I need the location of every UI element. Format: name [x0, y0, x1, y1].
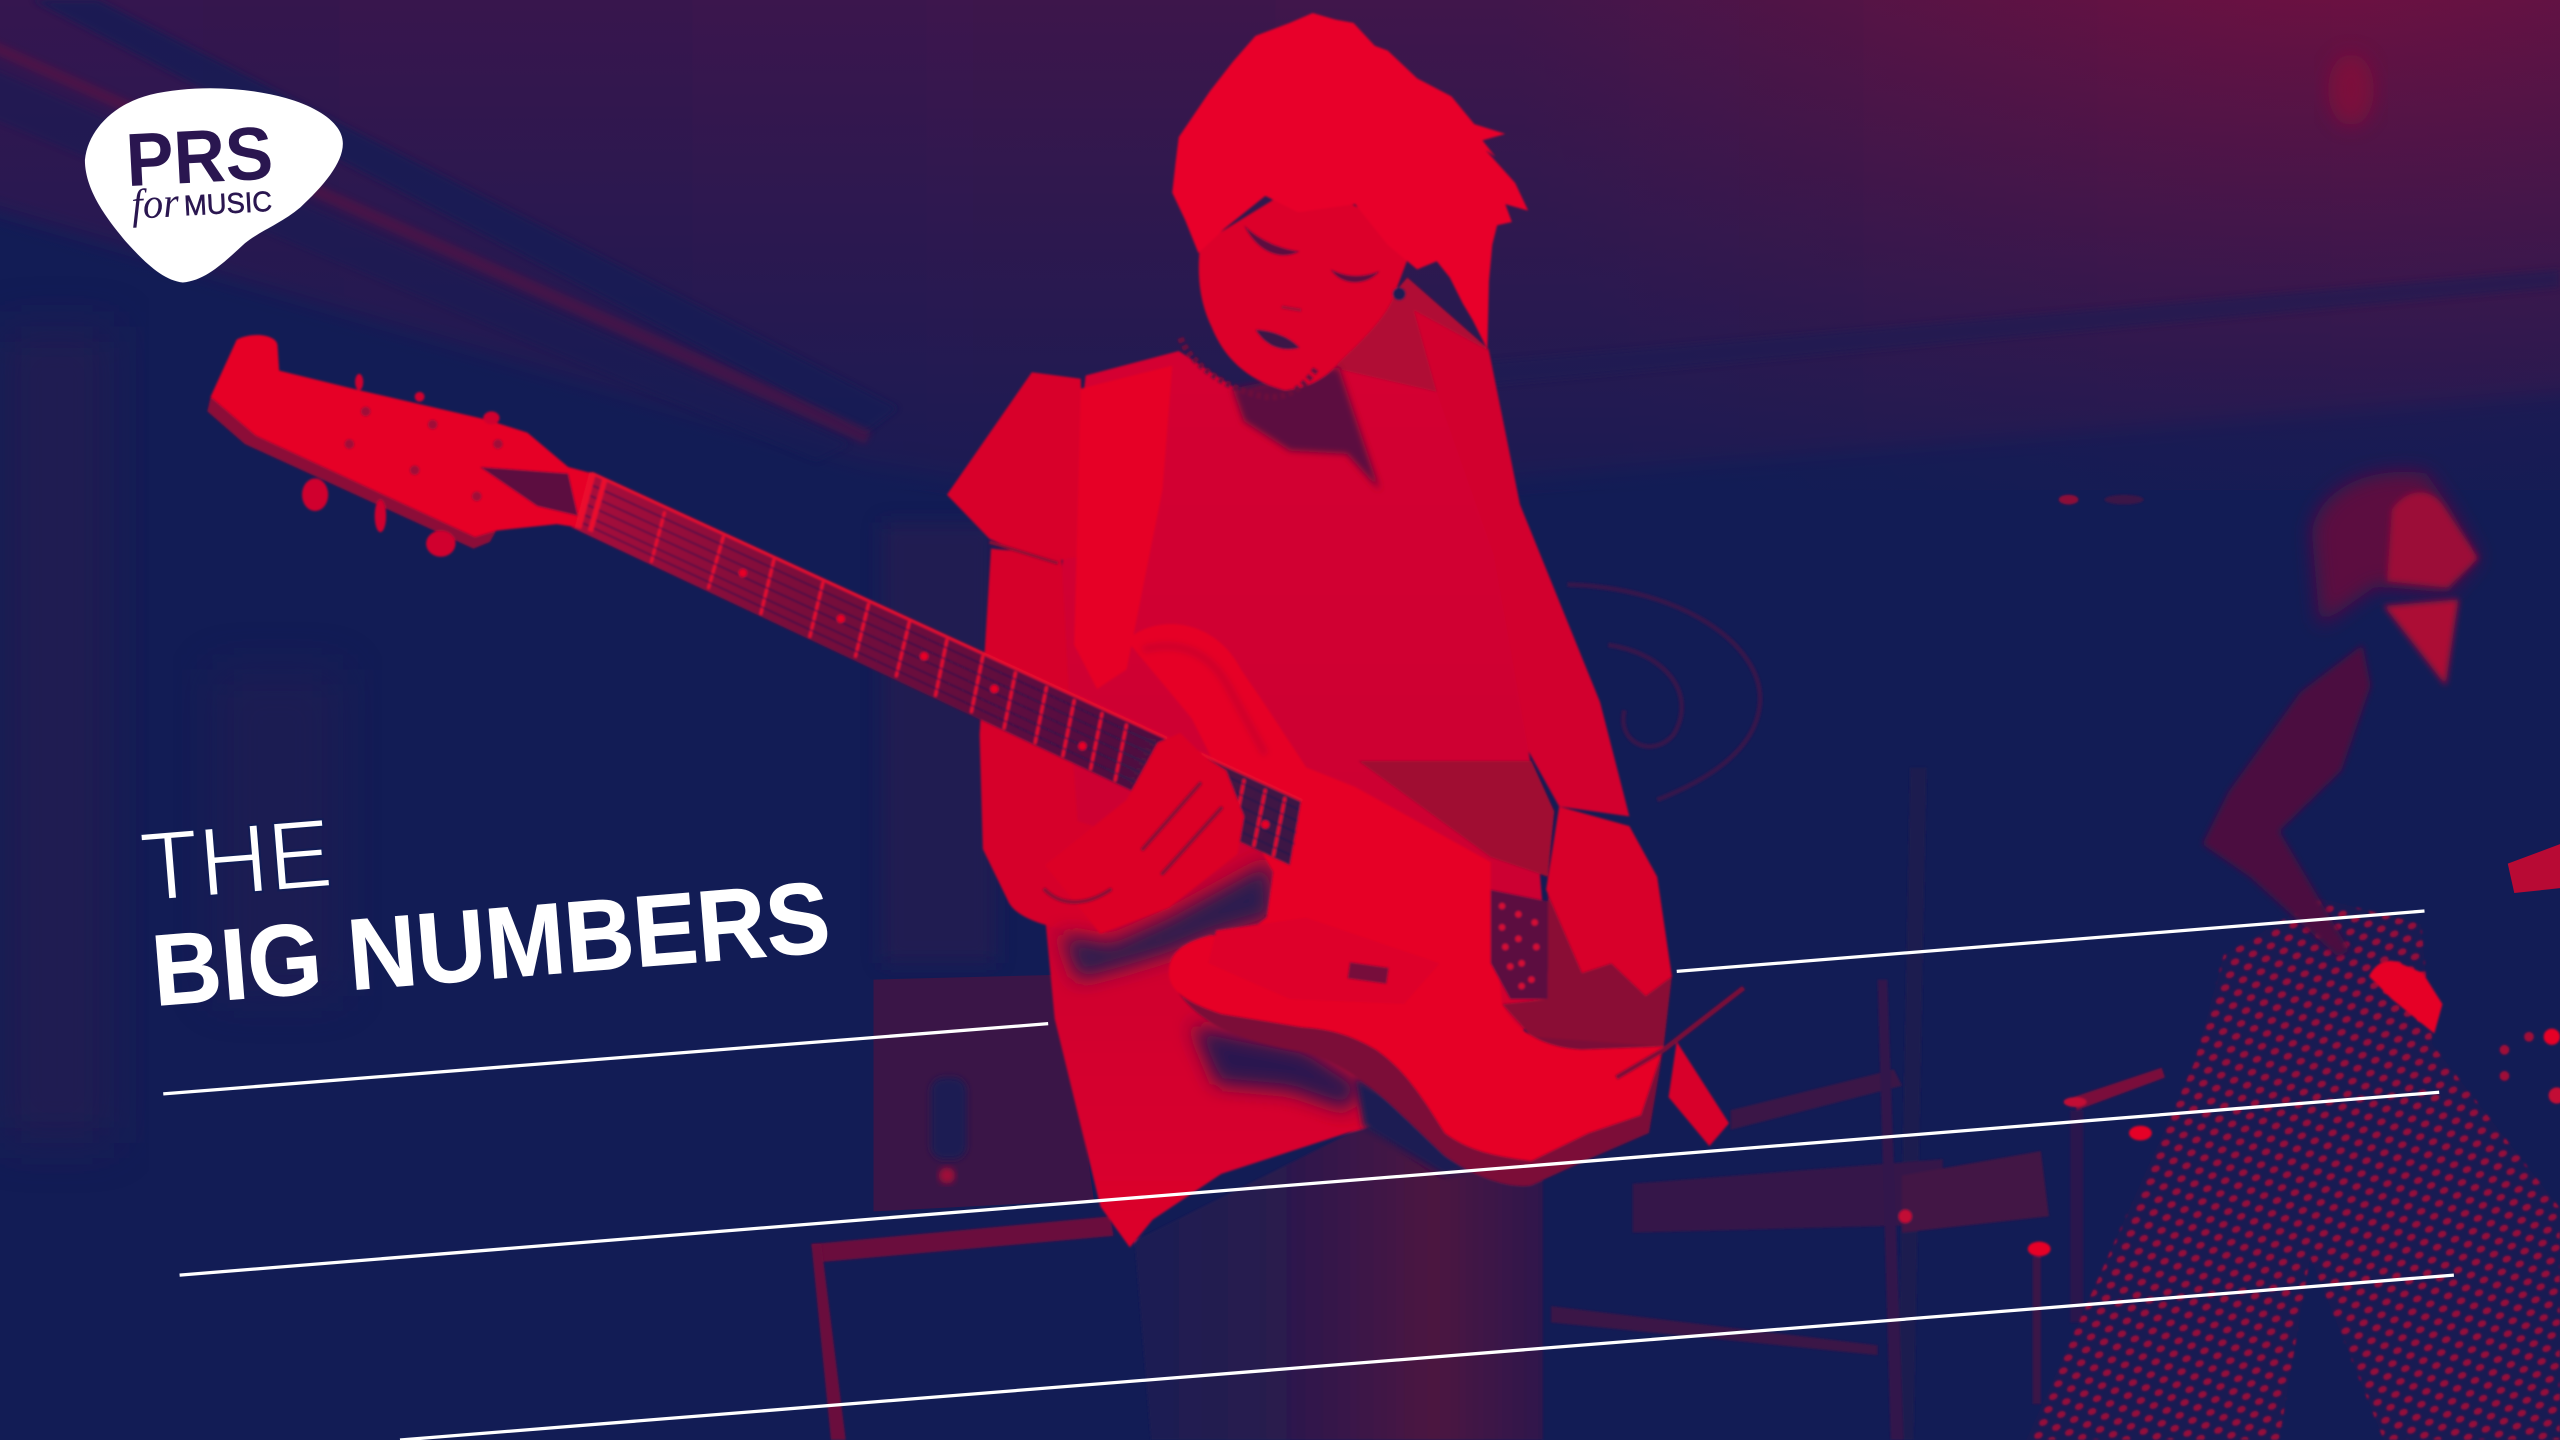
logo text: PRS: PRS — [124, 111, 275, 202]
trousers — [1135, 1127, 1543, 1440]
mic stand and drum kit — [1551, 495, 2560, 1440]
eyes, nose and mouth — [1244, 225, 1406, 349]
bridge — [1491, 890, 1548, 999]
fretting hand — [1045, 733, 1244, 934]
guitar body edge shadow — [1169, 973, 1664, 1186]
background logo circle on stage wall — [1567, 584, 1760, 800]
guitar logo on pickguard — [1348, 962, 1389, 984]
rear body panel — [1358, 761, 1554, 877]
guitar headstock piece — [2508, 844, 2560, 893]
second musician on right — [2026, 472, 2560, 1440]
face — [1199, 180, 1416, 390]
headstock — [207, 335, 607, 557]
sleeve seam — [989, 542, 1058, 563]
shirt — [999, 351, 1551, 1247]
hand — [2369, 961, 2442, 1033]
left arm — [980, 549, 1100, 934]
pickguard — [1208, 918, 1440, 1004]
logo text: for: for — [130, 179, 181, 229]
hair shadow strands — [1331, 278, 1510, 620]
logo: PRS for Music plectrum — [85, 88, 343, 282]
right arm — [1414, 310, 1629, 816]
guitar strap — [1074, 366, 1172, 689]
title: BIG NUMBERS: BIG NUMBERS — [148, 861, 834, 1028]
hair — [1172, 13, 1528, 349]
logo text: MUSIC: MUSIC — [183, 186, 273, 223]
shaded lower body under picking hand — [1502, 877, 1672, 1050]
strap end — [1669, 1042, 1729, 1146]
shadow under forearm — [1061, 862, 1273, 980]
right hand — [1546, 807, 1672, 996]
amplifier and stand at left of guitarist — [811, 975, 1113, 1440]
main guitarist — [207, 13, 1744, 1440]
hem fold — [1355, 1078, 1543, 1176]
arm — [2202, 645, 2371, 957]
shadow under guitar body — [1192, 1025, 1363, 1110]
guitar body — [1127, 624, 1664, 1161]
choker — [1180, 338, 1316, 397]
title: THE: THE — [137, 797, 336, 922]
sleeve — [947, 372, 1086, 563]
head and neck — [2312, 472, 2478, 686]
title — [137, 797, 834, 1028]
shadow under neck — [1233, 367, 1380, 490]
white staff lines — [163, 911, 2454, 1440]
guitar neck — [571, 473, 1301, 865]
fishnet trousers — [2026, 898, 2560, 1440]
guitar cable — [1616, 988, 1744, 1078]
guitar horn shading — [1143, 646, 1265, 754]
